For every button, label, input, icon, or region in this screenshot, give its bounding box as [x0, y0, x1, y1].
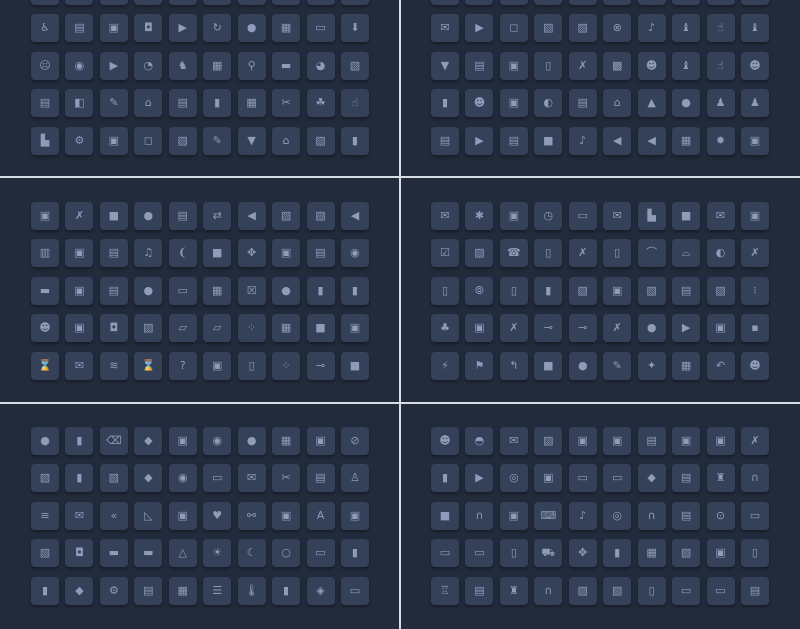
panel: middle-right icon grid: ✱: [475, 208, 484, 222]
panel: middle-right icon grid: ⌒: [646, 246, 657, 259]
panel: middle-right icon grid: ⁝: [753, 284, 757, 296]
panel: top-right icon grid: ▮: [442, 96, 448, 109]
panel: bottom-left icon grid: ▭: [315, 546, 326, 559]
panel: top-right icon grid: ▼: [441, 58, 449, 72]
panel: bottom-left icon grid: ▣: [178, 434, 188, 446]
panel: bottom-right icon grid: ◎: [612, 508, 622, 522]
panel: bottom-right icon grid: ▣: [681, 434, 691, 446]
panel: top-right icon grid: ◻: [509, 21, 518, 34]
panel: bottom-right icon grid: ⊙: [716, 508, 725, 522]
panel: middle-right icon grid: ↶: [716, 358, 725, 372]
panel: middle-right icon grid: ⦾: [475, 284, 484, 296]
panel: middle-right icon grid: [401, 178, 800, 402]
panel: bottom-right icon grid: ▣: [612, 434, 622, 446]
panel: top-right icon grid: ▣: [509, 96, 519, 109]
panel: bottom-right icon grid: ♖: [440, 584, 450, 596]
panel: middle-right icon grid: ▣: [750, 208, 760, 222]
panel: bottom-left icon grid: ▮: [76, 471, 82, 484]
panel: top-left icon grid: ◘: [144, 21, 153, 34]
panel: middle-right icon grid: ✉: [613, 208, 622, 222]
panel: bottom-right icon grid: ▣: [543, 471, 554, 484]
panel: middle-left icon grid: ▱: [213, 321, 221, 334]
panel: bottom-left icon grid: ◆: [144, 471, 153, 484]
divider: [0, 402, 800, 404]
panel: bottom-right icon grid: ▮: [442, 471, 448, 484]
panel: bottom-right icon grid: ▤: [474, 584, 485, 596]
panel: bottom-left icon grid: ✂: [281, 471, 291, 484]
panel: bottom-left icon grid: ◘: [75, 546, 84, 559]
panel: top-right icon grid: [401, 0, 800, 177]
panel: bottom-left icon grid: ▦: [178, 584, 188, 596]
panel: top-left icon grid: ▦: [281, 21, 291, 34]
panel: bottom-right icon grid: ▣: [578, 434, 588, 446]
panel: top-left icon grid: ▣: [109, 134, 119, 146]
panel: bottom-left icon grid: ▮: [283, 584, 289, 596]
panel: top-left icon grid: ▣: [109, 21, 119, 34]
panel: bottom-right icon grid: ▭: [578, 471, 588, 484]
panel: middle-left icon grid: ◀: [351, 208, 359, 222]
panel: bottom-left icon grid: ●: [40, 434, 50, 446]
panel: top-right icon grid: ♝: [681, 58, 691, 72]
panel: bottom-right icon grid: ◎: [509, 471, 519, 484]
panel: bottom-right icon grid: ▧: [543, 434, 554, 446]
panel: middle-right icon grid: ♣: [440, 321, 450, 334]
panel: middle-right icon grid: ▙: [647, 208, 656, 222]
panel: top-left icon grid: ◔: [144, 58, 153, 72]
panel: bottom-right icon grid: ▧: [612, 584, 622, 596]
panel: bottom-right icon grid: ■: [440, 508, 450, 522]
panel: middle-left icon grid: ☻: [39, 321, 51, 334]
panel: middle-right icon grid: ●: [578, 358, 588, 372]
panel: bottom-left icon grid: ⌫: [106, 434, 122, 446]
panel: top-right icon grid: ▦: [681, 134, 691, 146]
panel: middle-left icon grid: ✉: [75, 358, 84, 372]
panel: bottom-right icon grid: ▭: [750, 508, 760, 522]
panel: bottom-right icon grid: ▭: [474, 546, 485, 559]
panel: middle-right icon grid: ▭: [578, 208, 588, 222]
panel: bottom-right icon grid: ✉: [509, 434, 518, 446]
panel: bottom-right icon grid: ♜: [509, 584, 519, 596]
panel: bottom-right icon grid: ▦: [646, 546, 657, 559]
panel: top-right icon grid: ▩: [612, 58, 622, 72]
panel: top-left icon grid: ▦: [246, 96, 257, 109]
panel: bottom-left icon grid: 🌡: [245, 584, 259, 596]
panel: middle-right icon grid: ⊸: [578, 321, 587, 334]
panel: top-left icon grid: ◧: [74, 96, 85, 109]
panel: bottom-right icon grid: ⛟: [541, 546, 555, 559]
divider: [399, 0, 401, 629]
panel: middle-left icon grid: ▦: [281, 321, 291, 334]
panel: bottom-left icon grid: ⊘: [350, 434, 360, 446]
panel: bottom-left icon grid: ▤: [143, 584, 154, 596]
panel: bottom-left icon grid: ☰: [212, 584, 222, 596]
panel: top-right icon grid: ☝: [717, 58, 724, 72]
panel: bottom-left icon grid: △: [179, 546, 187, 559]
panel: bottom-left icon grid: ♥: [212, 508, 222, 522]
panel: bottom-left icon grid: ✉: [247, 471, 256, 484]
panel: top-left icon grid: ▶: [179, 21, 187, 34]
panel: top-right icon grid: ▶: [475, 21, 484, 34]
panel: bottom-right icon grid: ▮: [614, 546, 620, 559]
panel: bottom-left icon grid: ◉: [178, 471, 188, 484]
panel: middle-right icon grid: ▣: [715, 321, 726, 334]
panel: middle-right icon grid: ▯: [442, 284, 448, 296]
panel: middle-left icon grid: ▣: [281, 246, 291, 259]
panel: middle-left icon grid: ▭: [178, 284, 188, 296]
panel: middle-left icon grid: ◘: [110, 321, 118, 334]
panel: top-right icon grid: ♪: [648, 21, 655, 34]
panel: top-left icon grid: ▧: [315, 134, 326, 146]
panel: middle-left icon grid: ■: [315, 321, 326, 334]
panel: middle-left icon grid: [0, 178, 399, 402]
panel: bottom-left icon grid: ▦: [281, 434, 291, 446]
panel: top-left icon grid: [0, 0, 399, 177]
panel: middle-left icon grid: ▣: [212, 358, 222, 372]
panel: bottom-right icon grid: ▤: [681, 508, 691, 522]
panel: bottom-left icon grid: ◈: [316, 584, 325, 596]
panel: middle-left icon grid: ⌛: [141, 358, 155, 372]
panel: middle-left icon grid: ▤: [109, 284, 119, 296]
panel: top-left icon grid: ☘: [316, 96, 325, 109]
panel: bottom-left icon grid: ▣: [315, 434, 326, 446]
panel: bottom-left icon grid: ▣: [281, 508, 291, 522]
panel: top-left icon grid: ▮: [352, 134, 358, 146]
panel: top-right icon grid: ▤: [474, 58, 485, 72]
panel: middle-right icon grid: ▶: [682, 321, 690, 334]
panel: middle-left icon grid: ?: [180, 358, 186, 372]
panel: bottom-right icon grid: ▧: [681, 546, 691, 559]
panel: bottom-right icon grid: ⌨: [540, 508, 556, 522]
panel: bottom-right icon grid: ▭: [440, 546, 450, 559]
panel: middle-right icon grid: ✗: [750, 246, 760, 259]
panel: middle-left icon grid: ▧: [315, 208, 326, 222]
panel: bottom-left icon grid: ○: [281, 546, 291, 559]
panel: bottom-left icon grid: ▧: [40, 546, 50, 559]
panel: top-right icon grid: ☻: [646, 58, 657, 72]
panel: top-left icon grid: ▙: [41, 134, 49, 146]
panel: bottom-left icon grid: ♙: [350, 471, 360, 484]
panel: bottom-right icon grid: ▶: [475, 471, 484, 484]
panel: bottom-right icon grid: ∩: [751, 471, 759, 484]
panel: middle-left icon grid: ▤: [315, 246, 326, 259]
panel: top-right icon grid: ♟: [716, 96, 725, 109]
panel: bottom-right icon grid: ♪: [579, 508, 586, 522]
panel: middle-right icon grid: ▯: [614, 246, 620, 259]
panel: top-right icon grid: ■: [543, 134, 554, 146]
panel: top-left icon grid: ◻: [144, 134, 153, 146]
panel: top-right icon grid: ▤: [440, 134, 450, 146]
panel: top-left icon grid: ▧: [178, 134, 188, 146]
panel: middle-right icon grid: ▧: [646, 284, 657, 296]
panel: bottom-left icon grid: A: [317, 508, 324, 522]
panel: top-right icon grid: ◐: [544, 96, 553, 109]
panel: middle-left icon grid: ⁘: [281, 358, 291, 372]
panel: middle-left icon grid: ▣: [74, 284, 85, 296]
panel: bottom-right icon grid: ▤: [646, 434, 657, 446]
panel: middle-left icon grid: ⇄: [213, 208, 222, 222]
panel: middle-left icon grid: ▣: [74, 246, 85, 259]
panel: top-right icon grid: ♪: [579, 134, 586, 146]
panel: bottom-left icon grid: ✉: [75, 508, 84, 522]
panel: bottom-left icon grid: ◺: [144, 508, 153, 522]
panel: bottom-right icon grid: ∩: [475, 508, 483, 522]
panel: top-right icon grid: ⌂: [614, 96, 621, 109]
panel: bottom-left icon grid: ⚙: [109, 584, 119, 596]
panel: bottom-left icon grid: ◆: [75, 584, 84, 596]
panel: middle-left icon grid: ▬: [40, 284, 50, 296]
panel: top-right icon grid: ✹: [716, 134, 725, 146]
panel: bottom-left icon grid: ▮: [76, 434, 82, 446]
panel: middle-left icon grid: ▧: [143, 321, 154, 334]
panel: bottom-right icon grid: ▣: [509, 508, 519, 522]
panel: middle-left icon grid: ▮: [317, 284, 324, 296]
panel: middle-right icon grid: ✉: [716, 208, 725, 222]
panel: bottom-right icon grid: ▧: [578, 584, 588, 596]
panel: middle-right icon grid: ⌓: [682, 246, 690, 259]
panel: middle-left icon grid: ◉: [350, 246, 360, 259]
panel: bottom-left icon grid: ☾: [247, 546, 257, 559]
panel: top-right icon grid: ♝: [681, 21, 691, 34]
panel: middle-right icon grid: ✗: [578, 246, 587, 259]
panel: top-right icon grid: ▲: [647, 96, 656, 109]
panel: top-left icon grid: ♿: [40, 21, 50, 34]
panel: middle-left icon grid: ✗: [75, 208, 84, 222]
panel: bottom-left icon grid: ▮: [42, 584, 48, 596]
panel: middle-right icon grid: ✎: [613, 358, 622, 372]
panel: top-left icon grid: ▧: [350, 58, 360, 72]
panel: top-right icon grid: ◀: [647, 134, 656, 146]
panel: top-left icon grid: ⌂: [145, 96, 152, 109]
panel: top-left icon grid: ▮: [214, 96, 220, 109]
panel: top-right icon grid: ◀: [613, 134, 621, 146]
panel: middle-left icon grid: ▤: [109, 246, 119, 259]
panel: top-right icon grid: ▣: [509, 58, 519, 72]
panel: middle-left icon grid: ⁘: [247, 321, 256, 334]
panel: middle-right icon grid: ■: [681, 208, 691, 222]
panel: bottom-left icon grid: ▧: [40, 471, 50, 484]
panel: top-left icon grid: ⌂: [283, 134, 290, 146]
panel: bottom-right icon grid: ▭: [612, 471, 622, 484]
panel: middle-right icon grid: ▧: [578, 284, 588, 296]
panel: top-left icon grid: ✂: [281, 96, 291, 109]
panel: middle-left icon grid: ●: [144, 208, 153, 222]
panel: middle-right icon grid: ▣: [612, 284, 622, 296]
panel: middle-right icon grid: ▨: [474, 246, 485, 259]
panel: middle-left icon grid: ▣: [40, 208, 50, 222]
panel: top-left icon grid: ⬇: [350, 21, 360, 34]
panel: bottom-left icon grid: ▮: [352, 546, 358, 559]
panel: middle-left icon grid: ▱: [179, 321, 187, 334]
panel: middle-right icon grid: ▧: [715, 284, 726, 296]
panel: bottom-left icon grid: ◉: [212, 434, 222, 446]
panel: top-right icon grid: ▯: [545, 58, 551, 72]
panel: middle-right icon grid: ✗: [509, 321, 518, 334]
panel: top-left icon grid: ▶: [110, 58, 118, 72]
panel: bottom-left icon grid: ☀: [212, 546, 222, 559]
panel: top-right icon grid: ✗: [578, 58, 587, 72]
panel: bottom-right icon grid: ∩: [648, 508, 656, 522]
panel: bottom-left icon grid: ▭: [350, 584, 360, 596]
panel: middle-left icon grid: ■: [350, 358, 360, 372]
panel: middle-left icon grid: ♫: [143, 246, 153, 259]
panel: top-right icon grid: ☻: [474, 96, 485, 109]
panel: middle-right icon grid: ↰: [509, 358, 518, 372]
panel: top-left icon grid: ♞: [178, 58, 188, 72]
panel: bottom-left icon grid: ▬: [109, 546, 119, 559]
panel: top-left icon grid: ▤: [178, 96, 188, 109]
panel: bottom-left icon grid: ▧: [109, 471, 119, 484]
panel: bottom-right icon grid: ▯: [649, 584, 655, 596]
panel: middle-left icon grid: ⊸: [316, 358, 325, 372]
panel: bottom-left icon grid: ▣: [178, 508, 188, 522]
panel: middle-left icon grid: ▥: [40, 246, 50, 259]
panel: middle-left icon grid: ◀: [247, 208, 256, 222]
panel: middle-left icon grid: ▣: [74, 321, 85, 334]
panel: bottom-right icon grid: ☻: [439, 434, 451, 446]
panel: top-left icon grid: ☝: [352, 96, 358, 109]
panel: middle-right icon grid: ⚡: [441, 358, 449, 372]
panel: middle-right icon grid: ☎: [507, 246, 521, 259]
panel: middle-right icon grid: ▦: [681, 358, 691, 372]
panel: middle-right icon grid: ▣: [474, 321, 485, 334]
panel: middle-right icon grid: ◐: [716, 246, 725, 259]
panel: middle-left icon grid: ⌛: [38, 358, 52, 372]
panel: bottom-right icon grid: ▯: [752, 546, 758, 559]
panel: top-left icon grid: ◕: [316, 58, 325, 72]
panel: middle-right icon grid: ▯: [545, 246, 551, 259]
panel: top-left icon grid: ☹: [39, 58, 51, 72]
panel: top-left icon grid: ✎: [109, 96, 118, 109]
panel: top-right icon grid: ⊗: [613, 21, 622, 34]
panel: top-left icon grid: ◉: [75, 58, 84, 72]
panel: middle-right icon grid: ■: [543, 358, 554, 372]
panel: top-left icon grid: ▼: [247, 134, 256, 146]
panel: top-right icon grid: ▨: [578, 21, 588, 34]
panel: bottom-right icon grid: ▣: [715, 546, 726, 559]
panel: bottom-right icon grid: ▣: [715, 434, 726, 446]
panel: middle-right icon grid: ✗: [613, 321, 622, 334]
panel: middle-right icon grid: ▣: [509, 208, 519, 222]
panel: bottom-right icon grid: ◓: [475, 434, 484, 446]
panel: middle-left icon grid: ●: [144, 284, 153, 296]
panel: top-left icon grid: ▤: [40, 96, 50, 109]
panel: bottom-right icon grid: ◆: [647, 471, 656, 484]
panel: middle-right icon grid: ⊸: [544, 321, 553, 334]
panel: top-right icon grid: ▤: [578, 96, 588, 109]
panel: middle-right icon grid: ✉: [440, 208, 450, 222]
panel: middle-right icon grid: ⚑: [474, 358, 484, 372]
panel: bottom-left icon grid: ⚯: [247, 508, 256, 522]
panel: middle-right icon grid: ◷: [544, 208, 553, 222]
panel: top-left icon grid: ▦: [212, 58, 222, 72]
panel: bottom-left icon grid: ≡: [40, 508, 50, 522]
panel: top-right icon grid: ♟: [750, 96, 760, 109]
panel: middle-left icon grid: ▤: [178, 208, 188, 222]
panel: bottom-left icon grid: [0, 404, 399, 629]
panel: bottom-left icon grid: ▬: [143, 546, 154, 559]
panel: bottom-right icon grid: ▭: [715, 584, 726, 596]
panel: middle-right icon grid: ☻: [749, 358, 761, 372]
panel: middle-right icon grid: ▯: [511, 284, 517, 296]
panel: middle-left icon grid: ≋: [109, 358, 118, 372]
panel: top-right icon grid: ♝: [750, 21, 760, 34]
panel: middle-right icon grid: ▤: [681, 284, 691, 296]
panel: middle-left icon grid: ☒: [247, 284, 257, 296]
panel: middle-left icon grid: ▮: [352, 284, 358, 296]
panel: top-right icon grid: ▧: [543, 21, 554, 34]
panel: middle-right icon grid: ✦: [647, 358, 656, 372]
panel: bottom-left icon grid: ◆: [144, 434, 153, 446]
panel: middle-left icon grid: ❨: [178, 246, 187, 259]
panel: middle-left icon grid: ■: [109, 208, 119, 222]
panel: bottom-right icon grid: ▯: [511, 546, 517, 559]
panel: bottom-right icon grid: ∩: [544, 584, 552, 596]
panel: top-right icon grid: ☻: [749, 58, 761, 72]
panel: bottom-left icon grid: ●: [247, 434, 256, 446]
panel: bottom-left icon grid: ▣: [350, 508, 360, 522]
panel: middle-left icon grid: ▣: [350, 321, 360, 334]
panel: top-left icon grid: ▤: [74, 21, 85, 34]
panel: top-right icon grid: ✉: [440, 21, 450, 34]
panel: top-right icon grid: ▶: [475, 134, 484, 146]
panel: bottom-right icon grid: ▤: [681, 471, 691, 484]
panel: middle-left icon grid: ■: [212, 246, 222, 259]
panel: top-left icon grid: ▭: [315, 21, 326, 34]
panel: bottom-left icon grid: ▤: [315, 471, 326, 484]
panel: top-left icon grid: ⚲: [248, 58, 256, 72]
divider: [0, 176, 800, 178]
panel: middle-left icon grid: ▧: [281, 208, 291, 222]
panel: top-right icon grid: ☝: [717, 21, 724, 34]
panel: bottom-left icon grid: ▭: [212, 471, 222, 484]
panel: top-right icon grid: ▤: [509, 134, 519, 146]
panel: top-left icon grid: ↻: [213, 21, 222, 34]
panel: bottom-right icon grid: ▭: [681, 584, 691, 596]
panel: middle-left icon grid: ●: [281, 284, 291, 296]
panel: top-left icon grid: ✎: [213, 134, 222, 146]
panel: bottom-right icon grid: [401, 404, 800, 629]
panel: middle-right icon grid: ●: [647, 321, 656, 334]
panel: middle-right icon grid: ☑: [440, 246, 450, 259]
panel: top-left icon grid: ●: [247, 21, 256, 34]
panel: middle-left icon grid: ▯: [249, 358, 255, 372]
panel: top-left icon grid: ⚙: [74, 134, 84, 146]
panel: bottom-right icon grid: ✗: [750, 434, 760, 446]
panel: middle-left icon grid: ✥: [247, 246, 256, 259]
panel: bottom-right icon grid: ♜: [716, 471, 725, 484]
panel: middle-left icon grid: ▦: [212, 284, 222, 296]
panel: bottom-right icon grid: ✥: [578, 546, 587, 559]
panel: bottom-left icon grid: «: [110, 508, 117, 522]
panel: middle-right icon grid: ▪: [751, 321, 759, 334]
panel: top-right icon grid: ●: [681, 96, 691, 109]
panel: top-left icon grid: ▬: [281, 58, 291, 72]
panel: bottom-right icon grid: ▤: [750, 584, 760, 596]
panel: top-right icon grid: ▣: [750, 134, 760, 146]
panel: middle-right icon grid: ▮: [545, 284, 551, 296]
